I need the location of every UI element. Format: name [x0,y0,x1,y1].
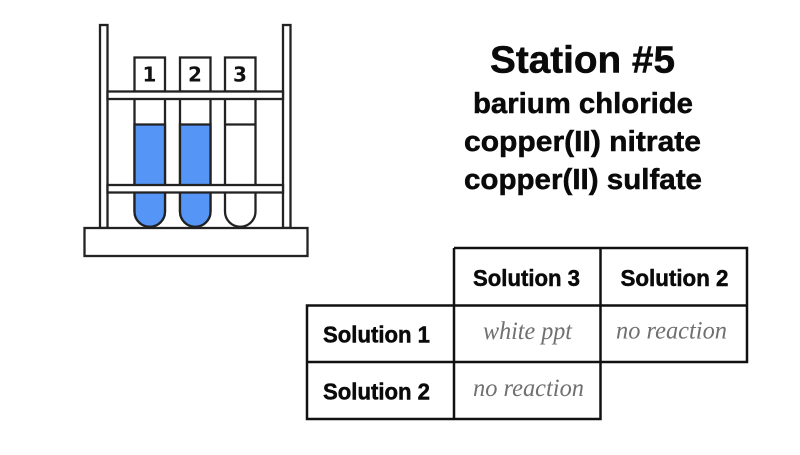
chemical: copper(II) nitrate: copper(II) nitrate [464,126,701,158]
rack base [84,228,308,256]
column header: Solution 2: Solution 2 [620,265,728,291]
tube number 3: 3 [233,62,247,86]
test tube 2 with blue liquid [180,91,210,227]
tube number 1: 1 [143,62,156,86]
chemical: barium chloride: barium chloride [473,88,693,120]
row header: Solution 2: Solution 2 [323,378,430,404]
tube number 2: 2 [188,62,202,86]
tube label box 1 [134,58,165,92]
left rack post [100,25,108,228]
cell: no reaction (row 2): no reaction [473,375,584,402]
row header: Solution 1: Solution 1 [323,322,430,348]
tube label box 3 [225,58,256,92]
chemical: copper(II) sulfate: copper(II) sulfate [464,164,702,196]
cell: white ppt: white ppt [483,318,573,345]
right rack post [283,25,290,228]
tube label box 2 [180,58,210,92]
cell: no reaction (row 1): no reaction [616,318,727,344]
test tube 1 with blue liquid [134,91,165,227]
illustration: test tube rack [84,25,308,256]
upper rack bar [108,92,283,99]
title: Station #5 [490,40,675,82]
test tube 3 with clear liquid [225,91,256,227]
lower rack bar [108,185,283,192]
column header: Solution 3: Solution 3 [473,265,580,291]
table grid [307,248,747,419]
reaction table [307,248,747,419]
chemical list [464,88,702,196]
